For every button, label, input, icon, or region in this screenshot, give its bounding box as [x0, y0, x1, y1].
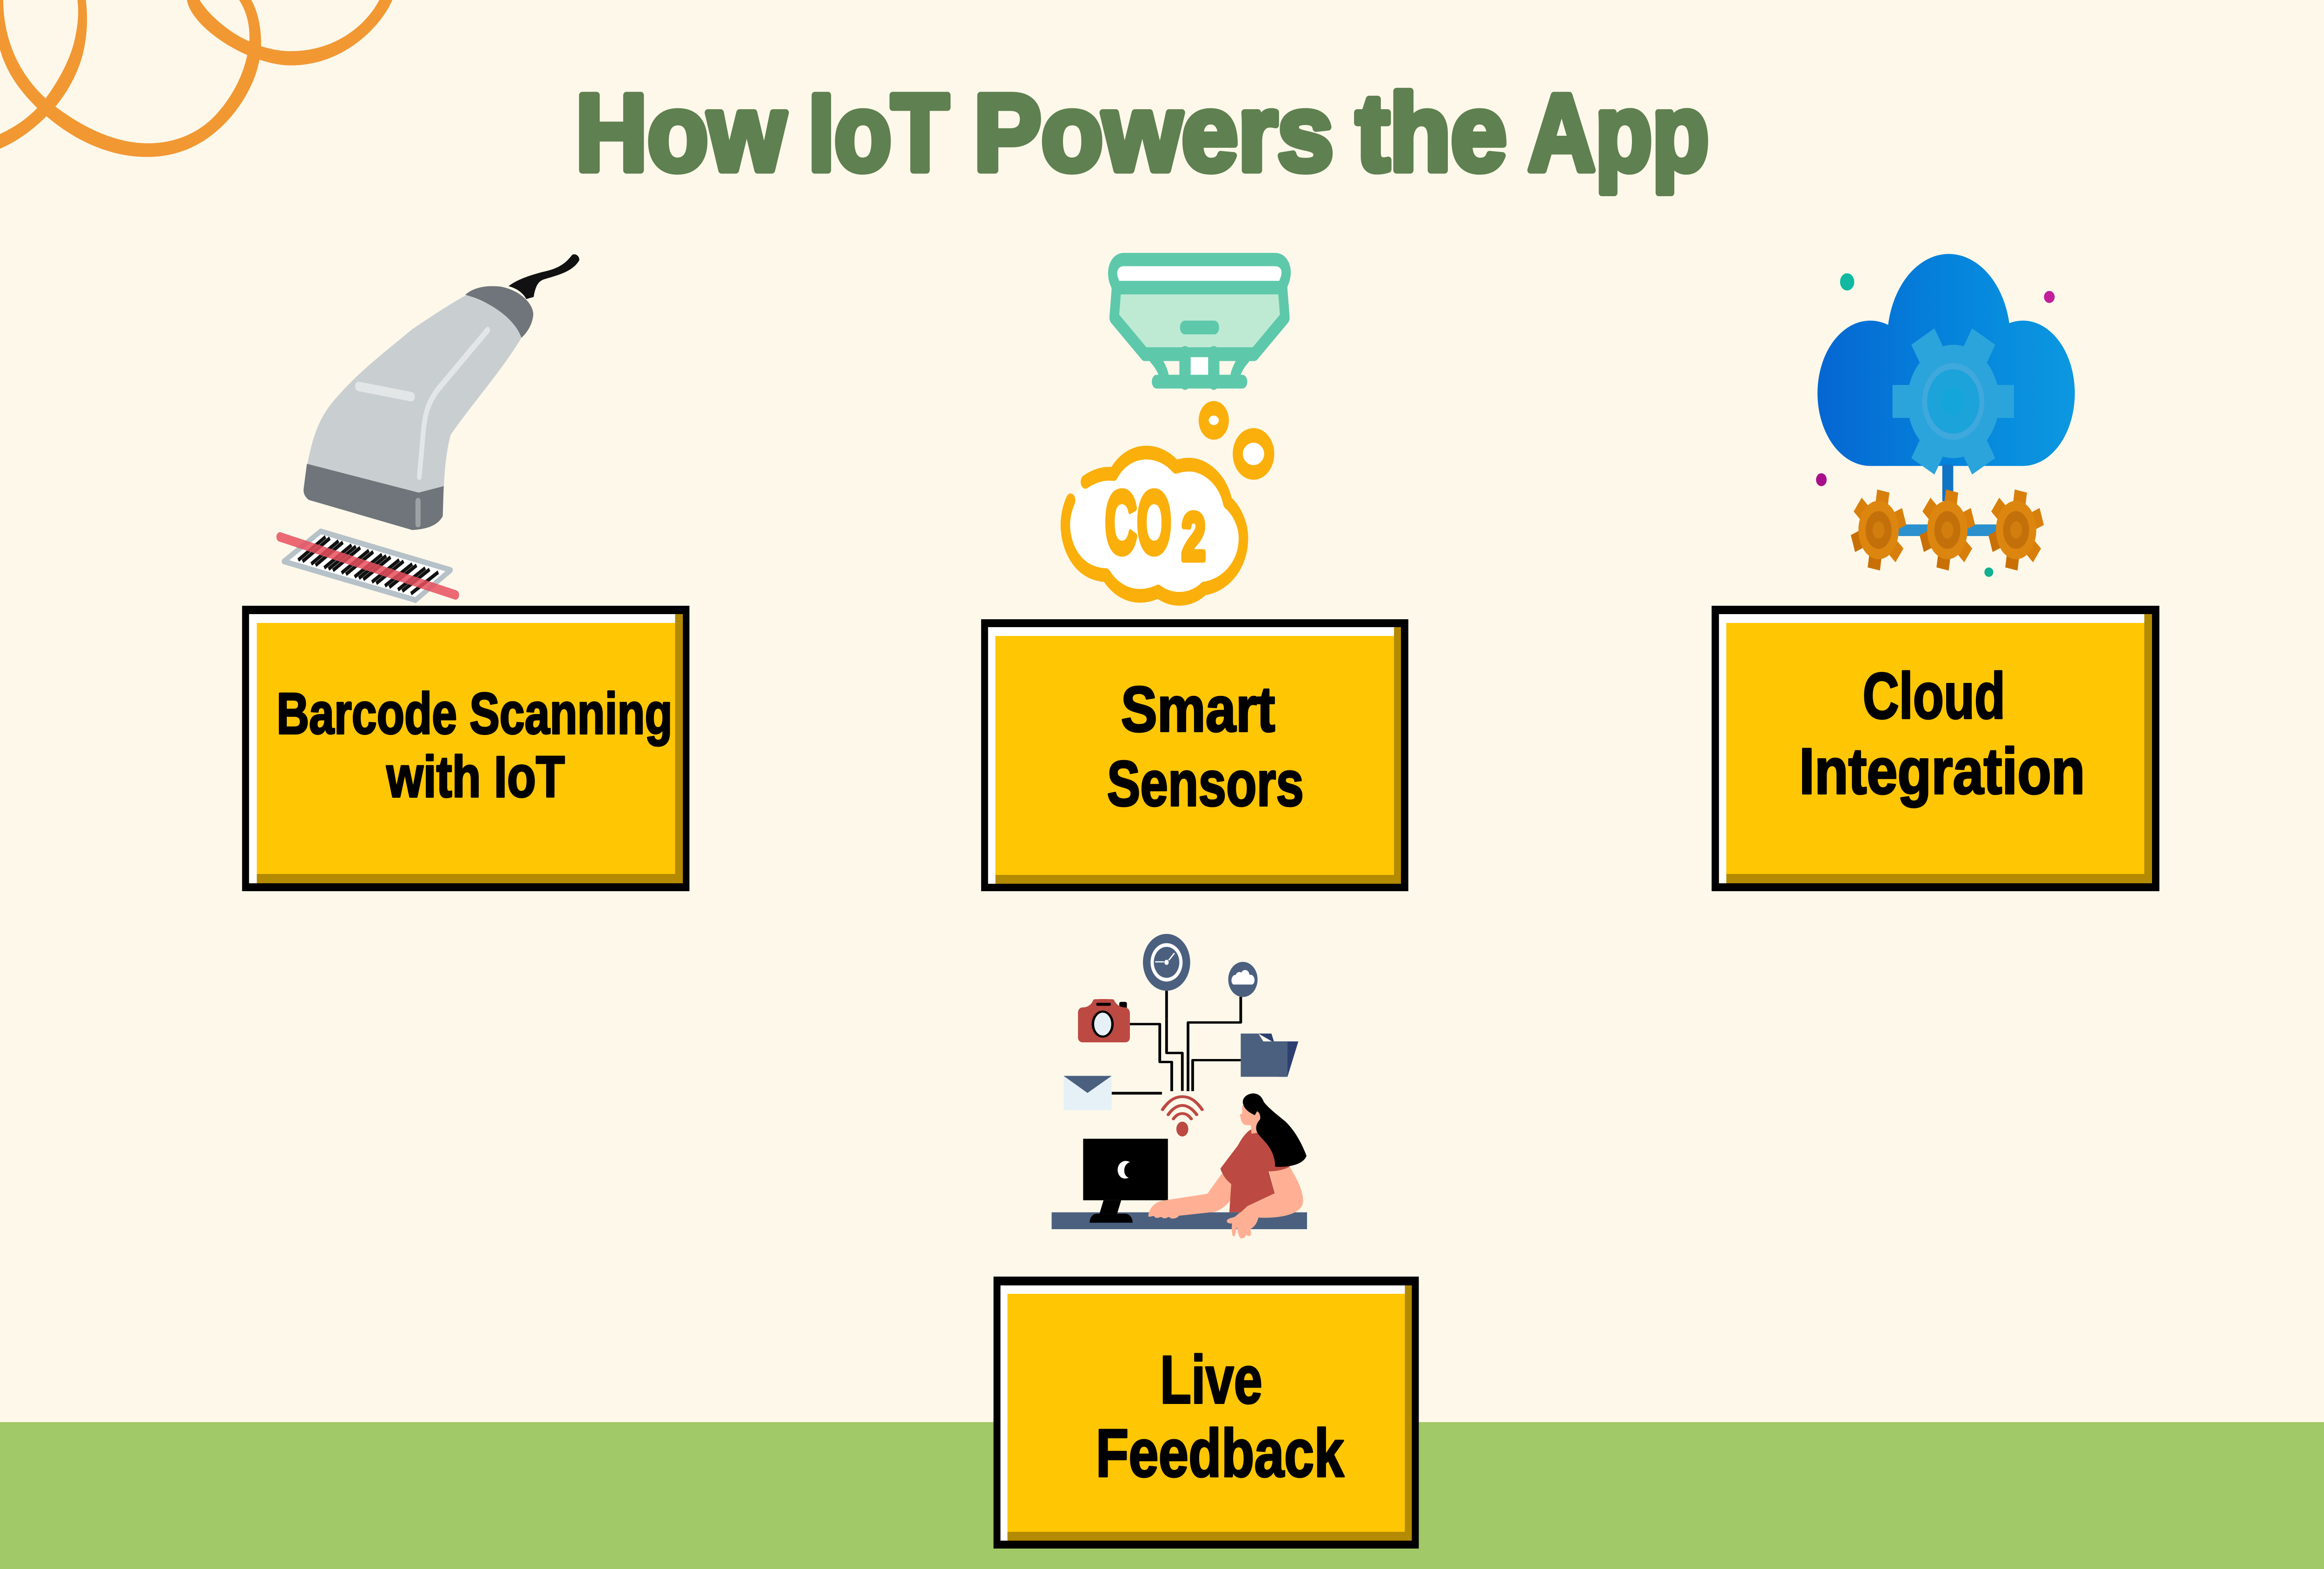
- sensor rim: [1113, 259, 1286, 287]
- barcode label: [284, 531, 451, 600]
- title: App: [1528, 72, 1709, 193]
- title: IoT: [808, 72, 949, 193]
- cloud badge: [1228, 962, 1258, 997]
- icon: cloud with gears: [1816, 254, 2075, 577]
- scanner cable: [508, 254, 579, 299]
- sensor body: [1114, 287, 1285, 354]
- panel: live feedback: [994, 1277, 1419, 1549]
- scanner highlights: [359, 386, 411, 397]
- co2 text: 2: [1182, 500, 1206, 574]
- large blue gear: [1893, 328, 2014, 475]
- cloud shape: [1817, 254, 2075, 466]
- small orange gears: [1851, 490, 2044, 570]
- decorative orange swirls: [0, 0, 392, 157]
- desk: [1052, 1212, 1307, 1229]
- label: cloud integration: Integration: [1799, 735, 2085, 808]
- clock icon: [1143, 934, 1190, 991]
- scanner head: [304, 464, 444, 530]
- monitor: [1083, 1139, 1168, 1223]
- red scan line: [280, 537, 456, 595]
- panel: cloud integration: [1711, 606, 2159, 891]
- co2 text: CO: [1105, 473, 1171, 572]
- sensor indicator: [1185, 320, 1215, 335]
- title: How: [575, 72, 786, 193]
- wifi signal: [1162, 1097, 1202, 1137]
- icon: woman at computer with connected devices: [1052, 934, 1307, 1238]
- scanner body: [307, 295, 522, 497]
- co2 cloud: [1065, 453, 1243, 599]
- camera icon: [1078, 999, 1130, 1042]
- label: cloud integration: Cloud: [1863, 660, 2005, 732]
- woman: [1149, 1093, 1307, 1238]
- scanner collar: [465, 286, 533, 338]
- envelope icon: [1063, 1076, 1112, 1110]
- icon: smoke sensor and CO2 cloud: [1065, 259, 1286, 599]
- sensor base: [1154, 354, 1246, 382]
- panel: barcode scanning: [242, 606, 689, 891]
- title: Powers: [974, 72, 1334, 193]
- label: live feedback: Feedback: [1096, 1416, 1344, 1491]
- label: barcode scanning: with IoT: [386, 745, 565, 809]
- title: the: [1356, 72, 1507, 193]
- connector lines: [1898, 465, 1996, 536]
- folder icon: [1241, 1033, 1298, 1077]
- coloured dots: [1816, 273, 2054, 577]
- label: live feedback: Live: [1160, 1342, 1262, 1418]
- label: smart sensors: Smart: [1121, 673, 1275, 745]
- label: smart sensors: Sensors: [1107, 748, 1304, 819]
- bubbles: [1204, 408, 1224, 432]
- green ground band: [0, 1422, 2324, 1569]
- barcode bars: [298, 537, 438, 594]
- label: barcode scanning: Barcode Scanning: [277, 682, 673, 746]
- icon: barcode scanner: [280, 254, 579, 600]
- wires: [1112, 991, 1241, 1093]
- panel: smart sensors: [981, 619, 1408, 891]
